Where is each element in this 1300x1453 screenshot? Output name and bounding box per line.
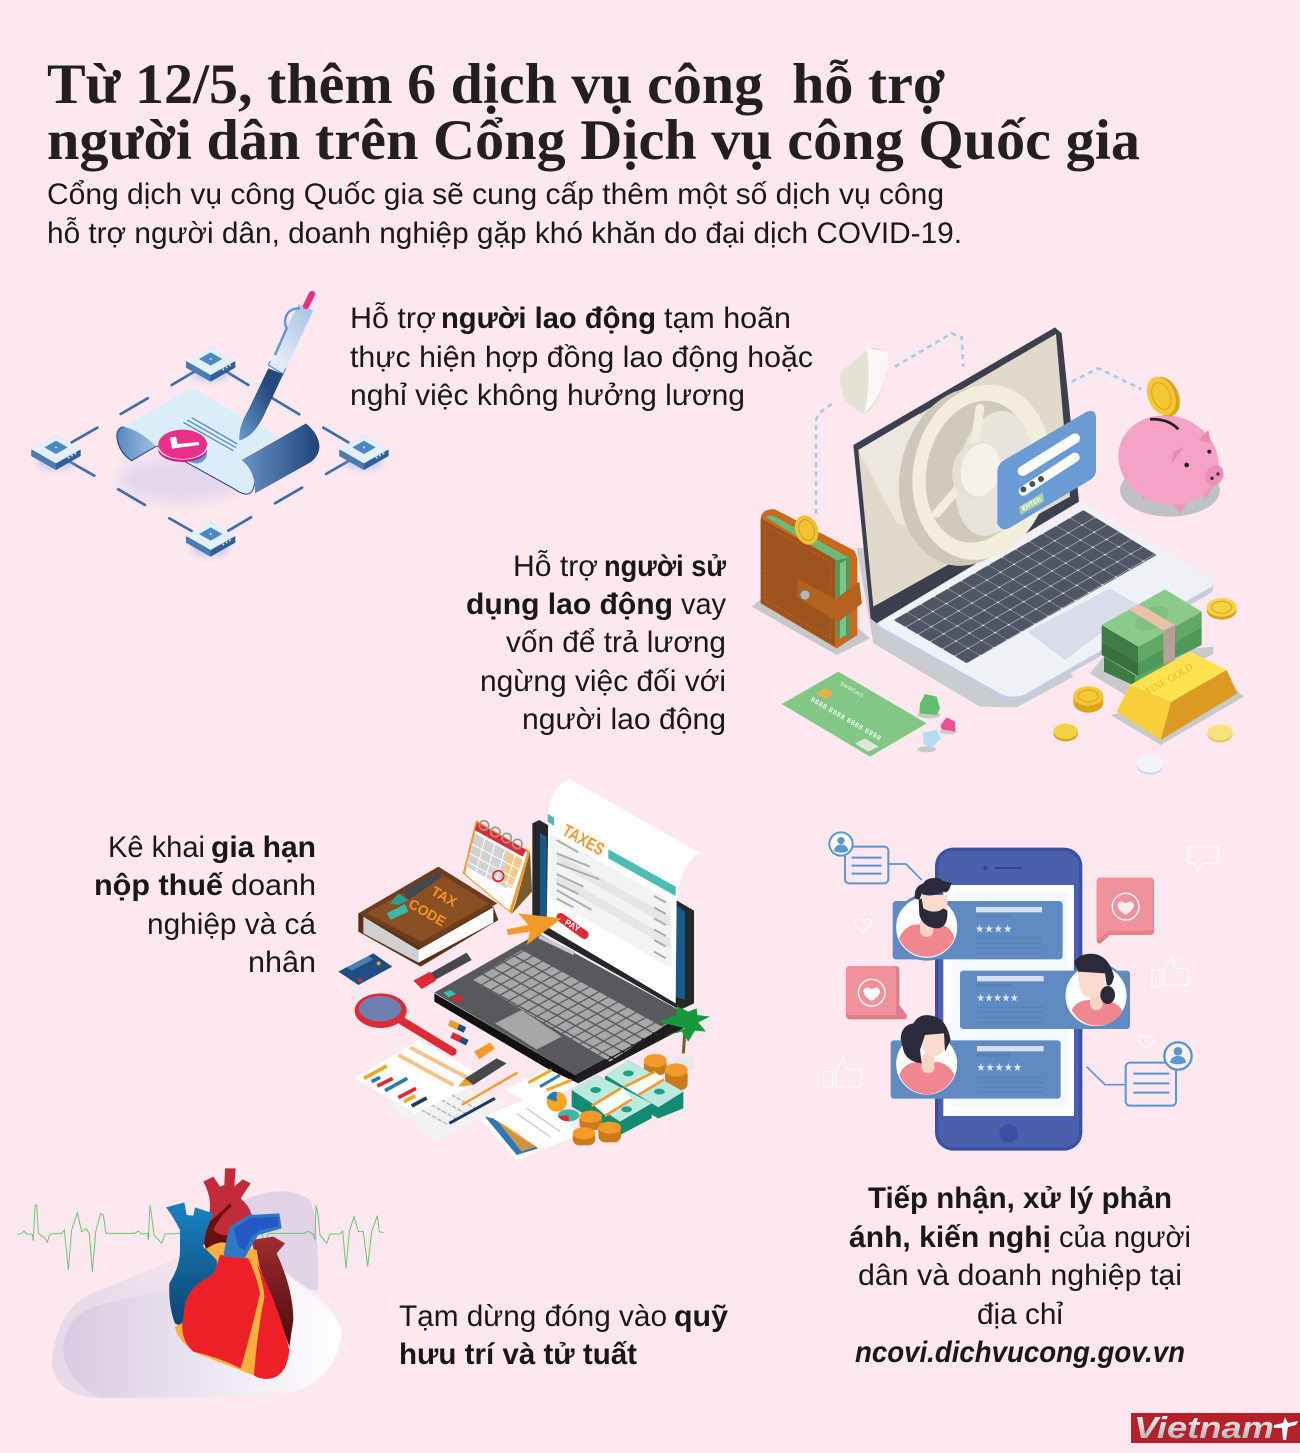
review card 1: ★★★★	[975, 922, 1012, 935]
text: feedback service: ánh, kiến nghị	[849, 1221, 1051, 1254]
heart	[166, 1168, 293, 1379]
laptop screen	[532, 820, 694, 1010]
tax code book	[358, 867, 498, 967]
wallet	[752, 509, 870, 655]
phone	[935, 848, 1082, 1151]
icon: laptop with safe, wallet, piggy bank and money	[752, 327, 1244, 775]
text: tax extension	[94, 831, 316, 979]
coins	[1053, 598, 1237, 775]
plant	[658, 1006, 710, 1073]
review card 3	[891, 1040, 1061, 1099]
text: employer loans: dụng lao động	[466, 588, 673, 621]
text: pension fund: quỹ	[674, 1300, 728, 1333]
pay button and cursor: PAY	[563, 917, 582, 934]
text: labour support	[350, 302, 813, 412]
text: labour support: Hỗ trợ	[350, 302, 436, 335]
login card: ENTER	[1021, 496, 1043, 513]
text: employer loans: ngừng việc đối với	[480, 665, 726, 698]
calendar	[463, 820, 532, 914]
text: labour support: thực hiện hợp đồng lao động hoặc	[350, 341, 813, 374]
laptop	[853, 327, 1213, 707]
text: feedback service: địa chỉ	[977, 1298, 1063, 1331]
login card	[997, 411, 1096, 529]
pay button and cursor	[507, 913, 584, 945]
text: feedback service: ncovi.dichvucong.gov.vn	[855, 1336, 1185, 1369]
icon: network contract and pen	[31, 294, 389, 557]
text: feedback service: của người	[1059, 1221, 1191, 1254]
icon: tax laptop and documents	[338, 779, 710, 1160]
avatar: woman with short hair	[895, 1015, 958, 1096]
ECG traces	[17, 1205, 383, 1272]
laptop base	[434, 933, 685, 1085]
cash stack	[1090, 589, 1213, 700]
background blobs	[52, 1191, 342, 1398]
avatar: bearded man	[896, 878, 957, 958]
review card 2: ★★★★★	[976, 991, 1019, 1004]
pens	[449, 1058, 517, 1123]
text: employer loans	[466, 550, 726, 736]
faint outline icons	[823, 847, 1218, 1087]
text: feedback service: Tiếp nhận, xử lý phản	[868, 1182, 1172, 1215]
text: employer loans: người sử	[604, 550, 726, 583]
report sheets	[355, 1040, 579, 1160]
avatar: woman with bun	[1064, 954, 1128, 1027]
review card 3: ★★★★★	[976, 1061, 1022, 1074]
text: tax extension: gia hạn	[211, 831, 316, 864]
bank card	[782, 672, 927, 757]
text: employer loans: vay	[681, 588, 726, 621]
red marker	[413, 953, 472, 989]
money and coins	[572, 1054, 688, 1145]
text: tax extension: nhân	[248, 946, 316, 979]
user message card bottom	[1087, 1042, 1192, 1106]
gold bar	[1111, 652, 1244, 745]
tax code book: TAX	[428, 883, 460, 910]
intro text	[47, 178, 962, 250]
shield	[840, 347, 888, 414]
text: feedback service: dân và doanh nghiệp tại	[858, 1259, 1182, 1292]
stationery	[449, 1023, 495, 1059]
logo: Vietnam+: Vietnam	[1134, 1410, 1274, 1445]
piggy bank	[1107, 372, 1230, 518]
magnifier	[355, 993, 453, 1052]
text: labour support: nghỉ việc không hưởng lương	[350, 379, 745, 412]
text: pension fund: hưu trí và tử tuất	[399, 1338, 637, 1371]
tax code book: CODE	[406, 895, 449, 929]
text: feedback service	[849, 1182, 1191, 1369]
text: employer loans: Hỗ trợ	[513, 550, 598, 583]
review card 1	[893, 901, 1063, 959]
bank card: BankCard	[839, 681, 864, 699]
taxes sheet	[547, 779, 700, 1003]
bank card: 8888 8888 8888 8888	[809, 696, 882, 743]
title	[47, 53, 1140, 172]
taxes sheet: TAXES	[559, 820, 608, 859]
gems	[917, 694, 957, 752]
text: tax extension: nộp thuế	[94, 869, 223, 902]
review card 2	[960, 971, 1130, 1029]
intro text: Cổng dịch vụ công Quốc gia sẽ cung cấp thêm một số dịch vụ công	[47, 178, 944, 211]
text: labour support: tạm hoãn	[664, 302, 791, 335]
icon: phone with user reviews	[823, 832, 1218, 1151]
text: employer loans: người lao động	[522, 703, 726, 736]
speech bubble with heart right	[1097, 878, 1154, 943]
user message card top	[829, 832, 922, 883]
text: labour support: người lao động	[441, 302, 656, 335]
title: Từ 12/5, thêm 6 dịch vụ công hỗ trợ	[47, 53, 945, 116]
title: người dân trên Cổng Dịch vụ công Quốc gia	[47, 109, 1140, 172]
text: employer loans: vốn để trả lương	[506, 626, 726, 659]
gold bar: FINE GOLD	[1144, 662, 1195, 698]
dashed connectors	[816, 333, 1142, 514]
intro text: hỗ trợ người dân, doanh nghiệp gặp khó khăn do đại dịch COVID-19.	[47, 217, 962, 250]
text: tax extension: doanh	[231, 869, 316, 902]
text: pension fund: Tạm dừng đóng vào	[399, 1300, 667, 1333]
small card	[338, 953, 392, 985]
icon: heart with ECG	[17, 1168, 383, 1398]
text: tax extension: nghiệp và cá	[147, 908, 316, 941]
text: pension fund	[399, 1300, 728, 1371]
text: tax extension: Kê khai	[108, 831, 205, 864]
speech bubble with heart left	[846, 966, 907, 1019]
